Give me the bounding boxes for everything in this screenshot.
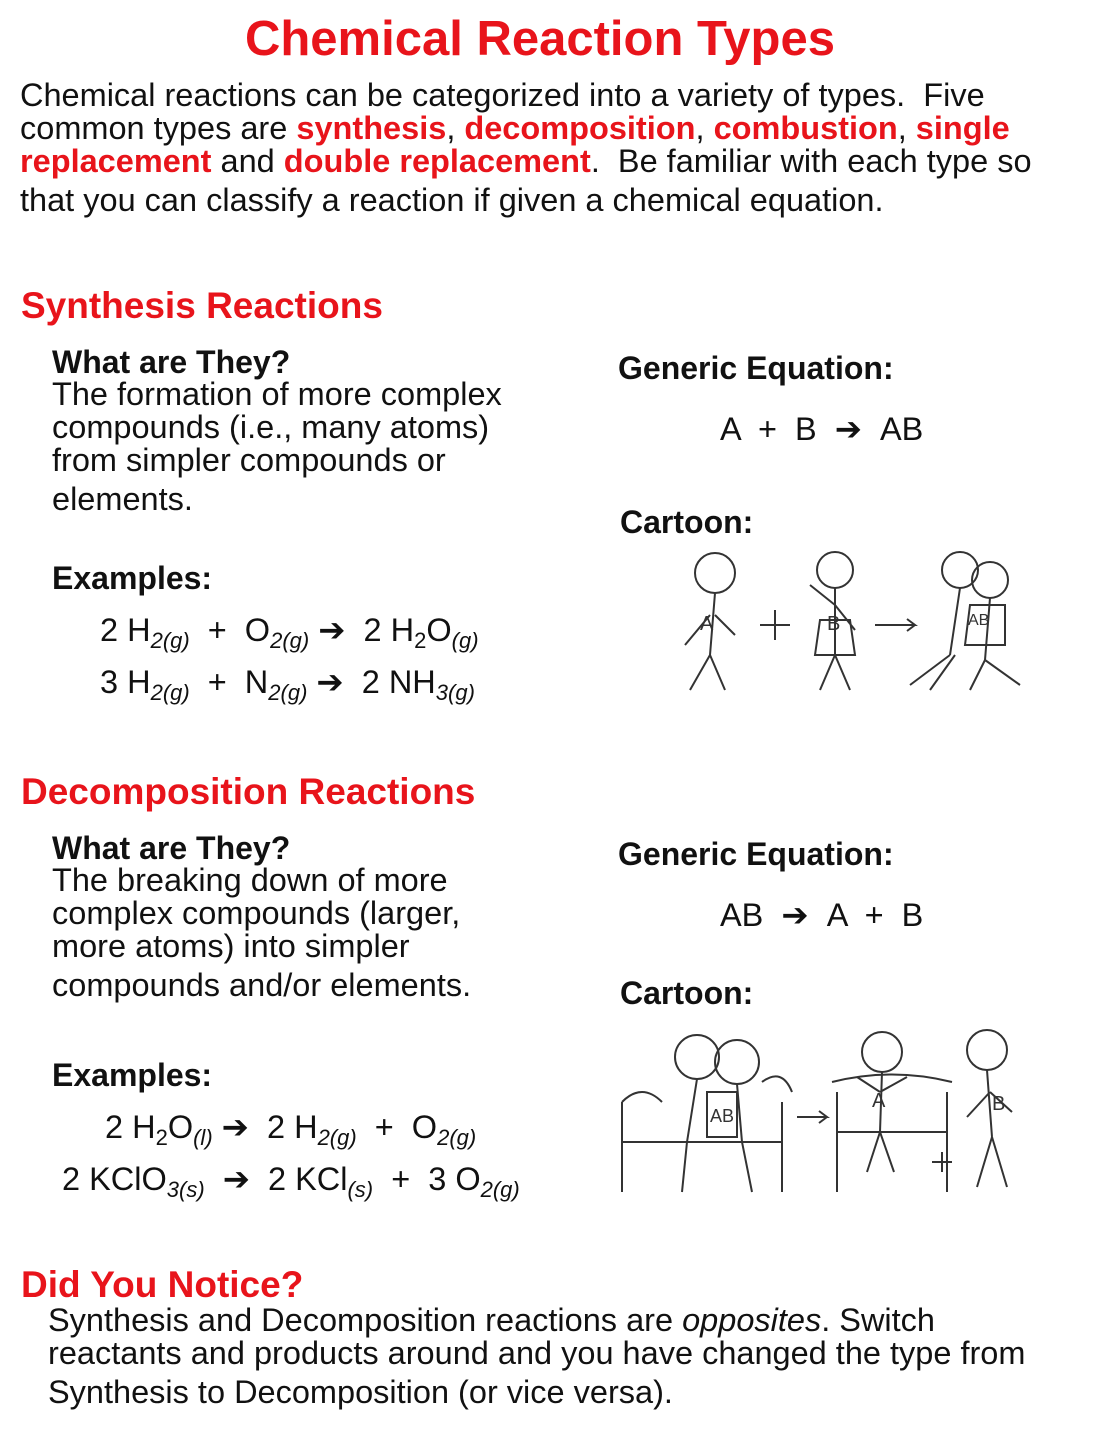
synthesis what are they: from simpler compounds or — [52, 442, 446, 478]
title: Chemical Reaction Types — [245, 12, 835, 66]
cartoon: decomposition: B — [992, 1093, 1005, 1115]
cartoon label: Cartoon: — [620, 504, 753, 540]
notice text: reactants and products around and you have changed the type from — [48, 1335, 1025, 1371]
synthesis what are they: elements. — [52, 481, 193, 517]
notice text — [48, 1302, 1025, 1410]
cartoon: decomposition: AB — [710, 1106, 734, 1126]
heading: did you notice: Did You Notice? — [21, 1264, 303, 1305]
synthesis what are they: compounds (i.e., many atoms) — [52, 409, 489, 445]
cartoon: decomposition: A — [872, 1090, 886, 1112]
text: 2 KClO3(s) ➔ 2 KCl(s) + 3 O2(g) — [62, 1161, 520, 1202]
heading: synthesis: Synthesis Reactions — [21, 285, 383, 326]
equation A+B->AB: A + B ➔ AB — [720, 411, 923, 447]
synthesis examples heading: Examples: — [52, 560, 212, 596]
text: 3 H2(g) + N2(g) ➔ 2 NH3(g) — [100, 664, 475, 705]
cartoon: synthesis: AB — [968, 612, 989, 629]
intro text — [20, 77, 1032, 218]
cartoon: decomposition — [621, 1029, 1013, 1192]
notice text: Synthesis and Decomposition reactions are opposites. Switch — [48, 1302, 935, 1338]
synthesis what are they: The formation of more complex — [52, 376, 502, 412]
decomposition example equations: 2 H2O(l) ➔ 2 H2(g) + O2(g) — [105, 1109, 476, 1150]
decomposition what are they: What are They? — [52, 830, 290, 866]
synthesis what are they: What are They? — [52, 344, 290, 380]
intro text: replacement and double replacement. Be familiar with each type so — [20, 143, 1032, 179]
decomposition what are they: The breaking down of more — [52, 862, 448, 898]
decomposition examples heading: Examples: — [52, 1057, 212, 1093]
equation AB->A+B: AB ➔ A + B — [720, 897, 923, 933]
cartoon: synthesis — [684, 551, 1020, 691]
decomposition what are they — [52, 830, 471, 1003]
heading: decomposition: Decomposition Reactions — [21, 771, 475, 812]
synthesis generic equation: Generic Equation: — [618, 350, 894, 386]
synthesis example equations: 2 H2(g) + O2(g) ➔ 2 H2O(g) — [100, 612, 479, 653]
decomposition what are they: more atoms) into simpler — [52, 928, 410, 964]
intro text: that you can classify a reaction if given a chemical equation. — [20, 182, 884, 218]
cartoon: synthesis: B — [827, 613, 840, 635]
notice text: Synthesis to Decomposition (or vice versa). — [48, 1374, 673, 1410]
cartoon label: Cartoon: — [620, 975, 753, 1011]
decomposition what are they: complex compounds (larger, — [52, 895, 460, 931]
cartoon: synthesis: A — [700, 613, 714, 635]
decomposition generic equation: Generic Equation: — [618, 836, 894, 872]
synthesis what are they — [52, 344, 502, 517]
decomposition what are they: compounds and/or elements. — [52, 967, 471, 1003]
intro text: Chemical reactions can be categorized into a variety of types. Five — [20, 77, 985, 113]
intro text: common types are synthesis, decomposition, combustion, single — [20, 110, 1010, 146]
